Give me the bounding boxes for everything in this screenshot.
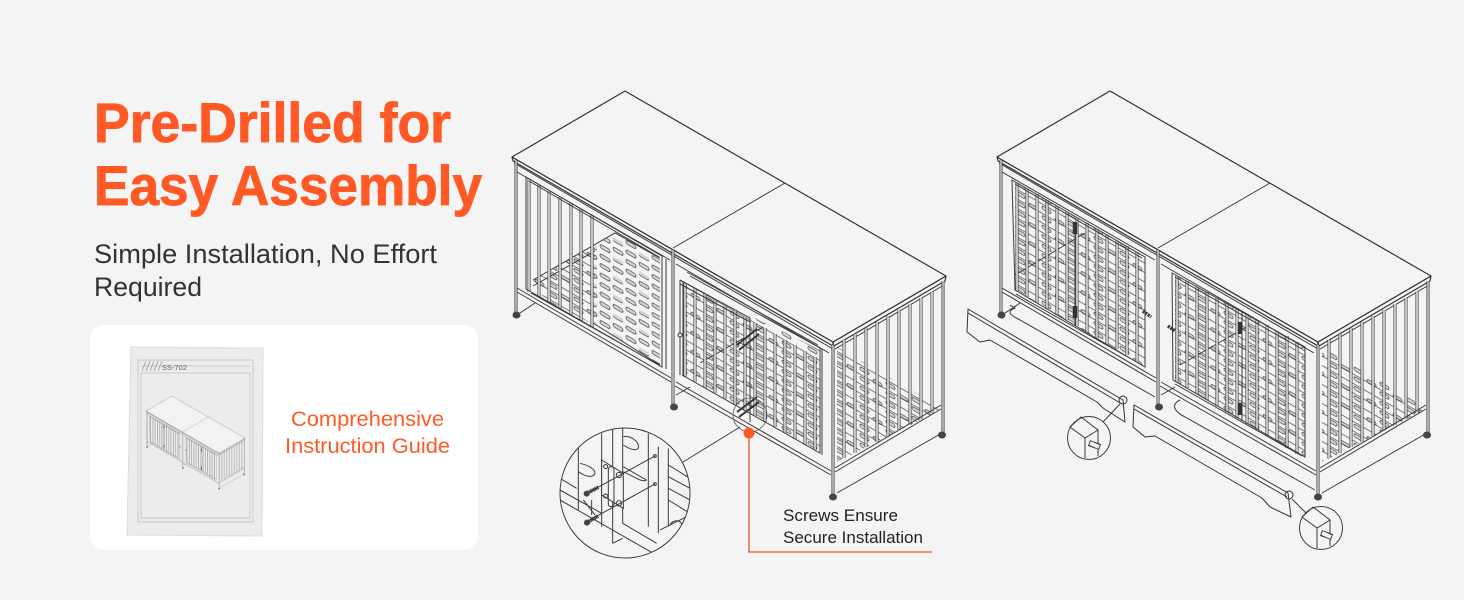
title: Pre-Drilled for xyxy=(94,91,451,154)
icon: instruction booklet xyxy=(127,347,263,536)
back panel and floor perforations xyxy=(533,233,940,462)
guide label: Comprehensive xyxy=(291,407,444,431)
guide label: Instruction Guide xyxy=(285,434,450,458)
tabletop xyxy=(512,91,946,353)
subtitle: Required xyxy=(94,272,202,302)
subtitle xyxy=(94,239,437,302)
detail callout: peg 1 xyxy=(1068,396,1127,460)
icon: instruction booklet: SS-702 xyxy=(162,363,187,372)
left kennel illustration xyxy=(512,91,946,500)
panel: instruction guide card xyxy=(90,325,478,550)
skirt board 2 xyxy=(1133,405,1291,517)
door bars xyxy=(1012,180,1305,457)
callout text xyxy=(783,506,923,547)
skirt board 1 xyxy=(967,309,1125,422)
end bars xyxy=(844,292,932,458)
title: Easy Assembly xyxy=(94,154,482,217)
callout line and dot xyxy=(744,428,932,552)
guide label xyxy=(285,407,450,458)
front bars, first section xyxy=(526,177,666,369)
right kennel illustration xyxy=(997,91,1431,500)
posts, rails and feet xyxy=(512,160,946,500)
detail callout: screws xyxy=(560,398,767,558)
kennel frame and top xyxy=(512,91,946,500)
title xyxy=(94,91,482,217)
door bars, second section xyxy=(678,272,822,455)
floor slot outlines under kennel xyxy=(1010,305,1315,490)
kennel frame and top xyxy=(997,91,1431,500)
detail callout: peg 2 xyxy=(1285,491,1342,550)
perforations xyxy=(1015,182,1425,462)
subtitle: Simple Installation, No Effort xyxy=(94,239,437,269)
callout text: Screws Ensure xyxy=(783,506,898,525)
callout text: Secure Installation xyxy=(783,528,923,547)
